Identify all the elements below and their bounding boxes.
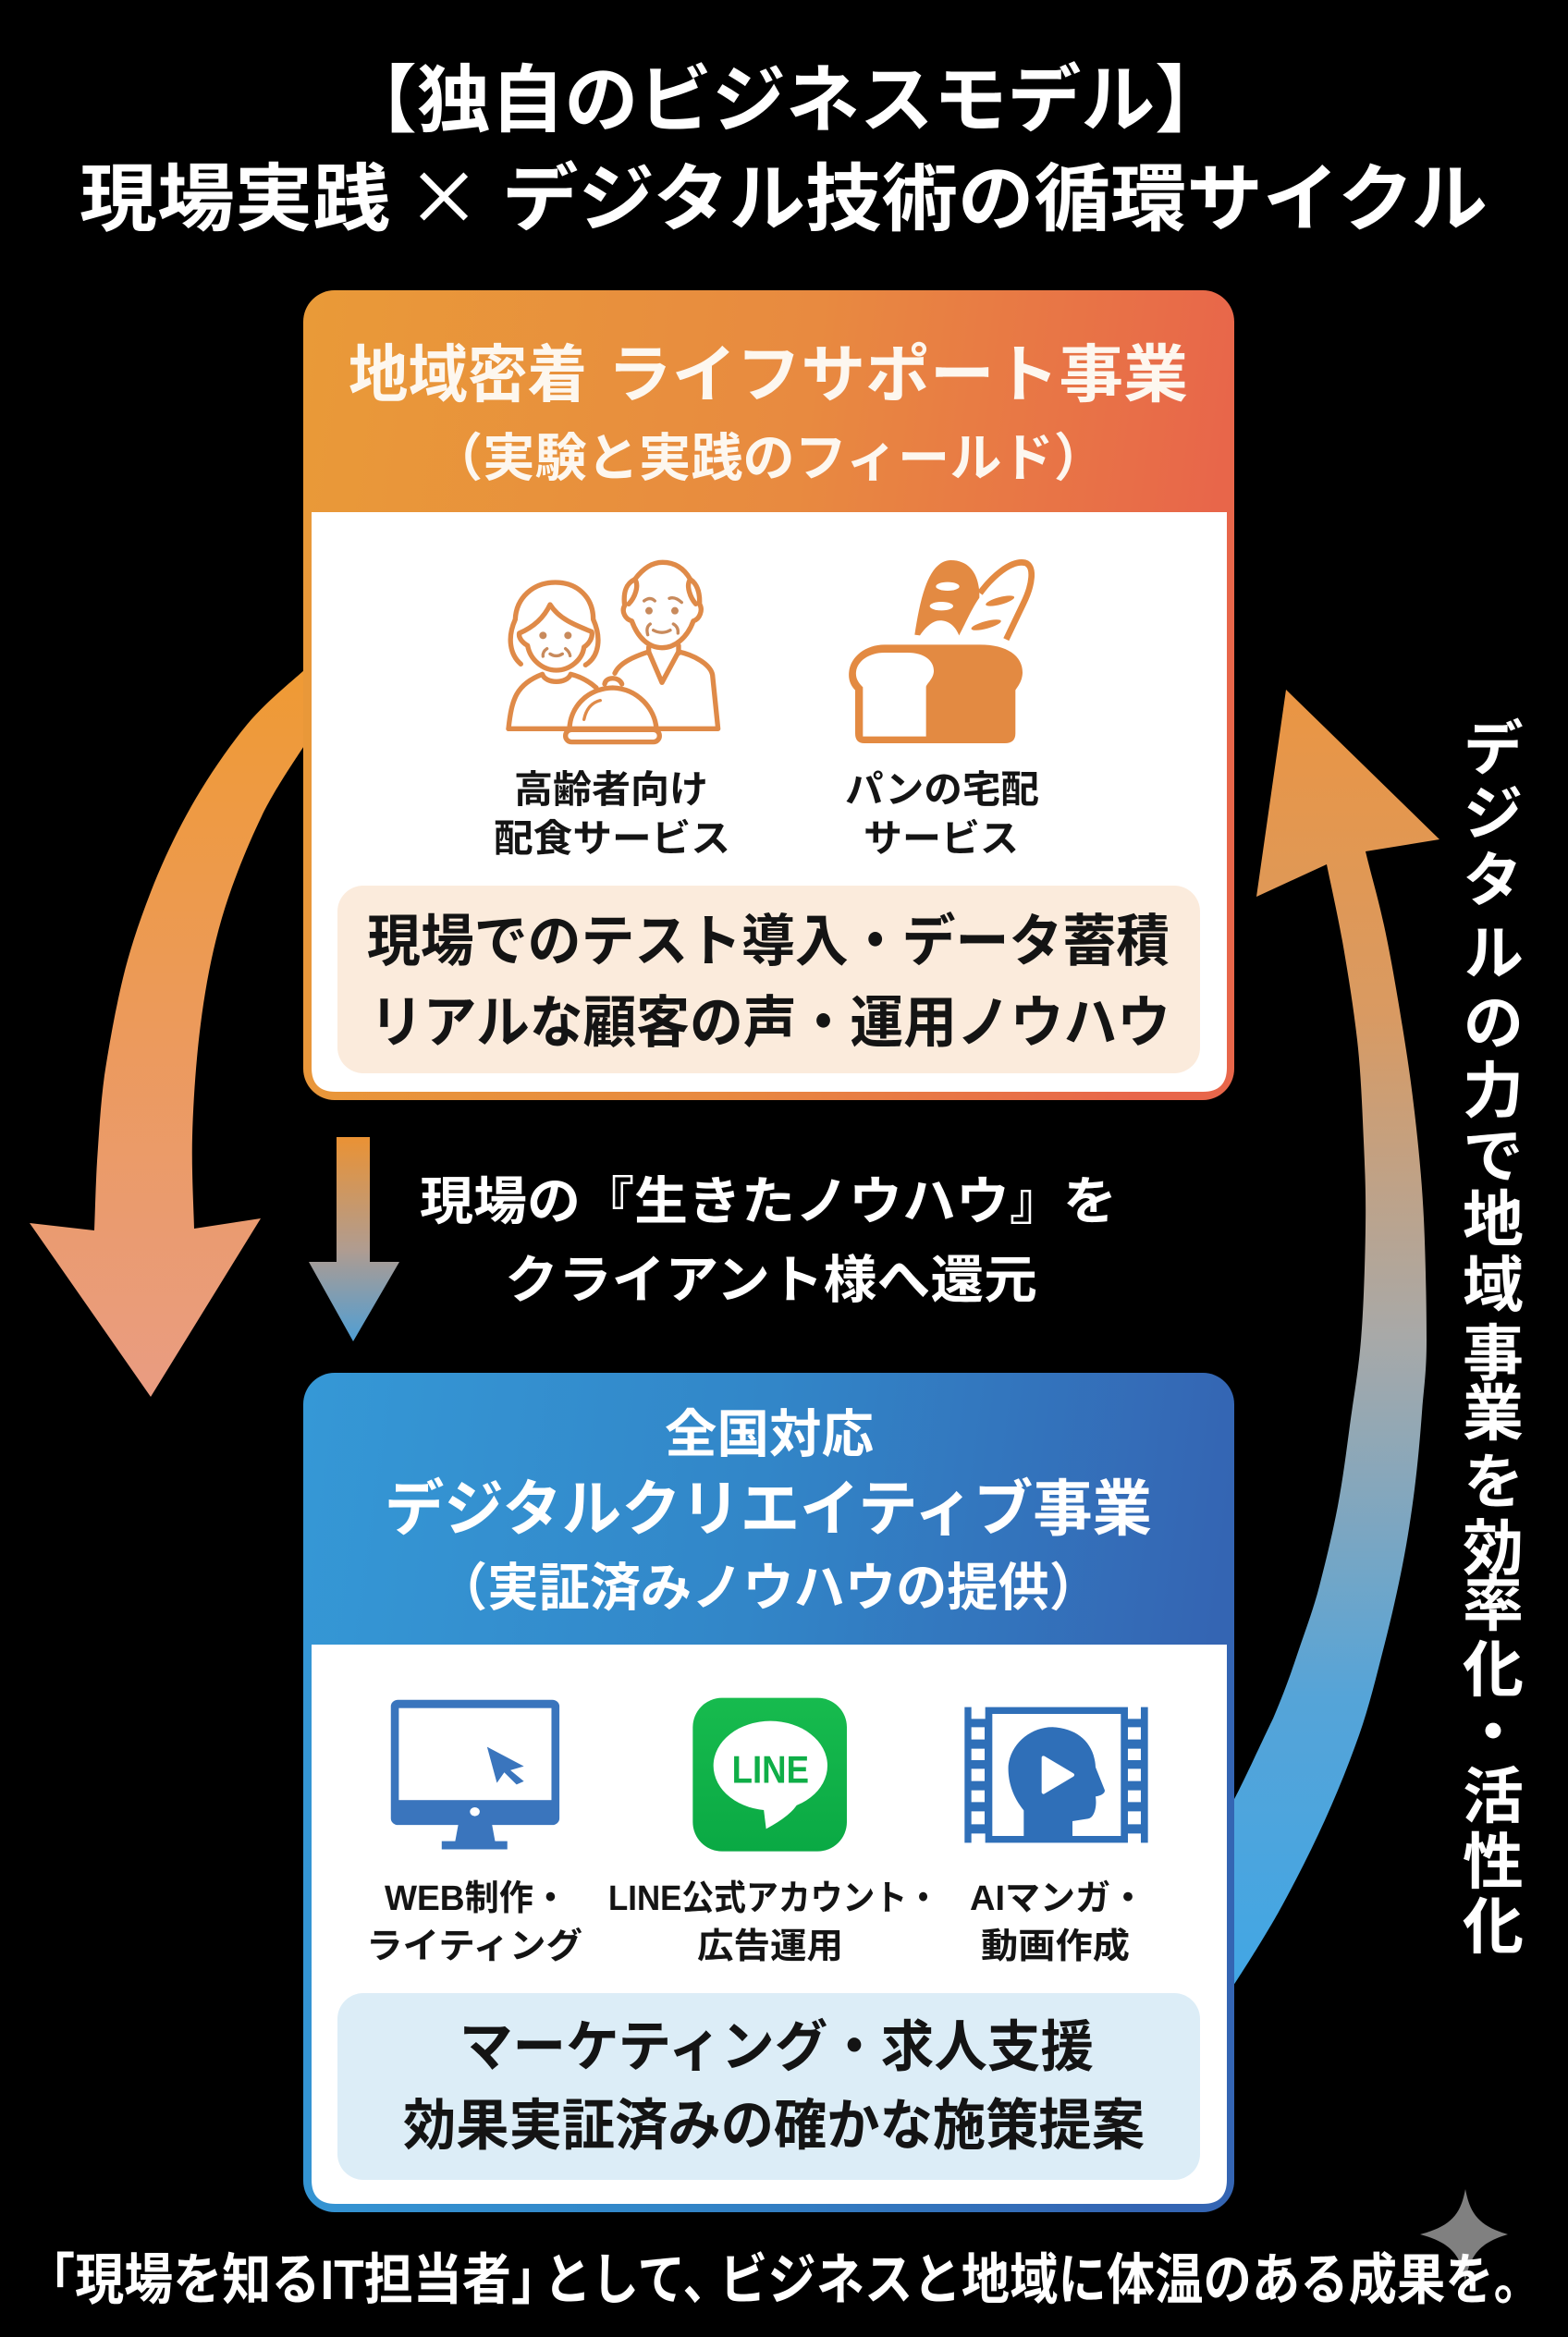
- panel heading: デジタルクリエイティブ事業: [385, 1474, 1152, 1543]
- callout: field data: [337, 886, 1200, 1073]
- icon: bread and baguettes: [849, 560, 1032, 743]
- panel heading: （実証済みノウハウの提供）: [436, 1559, 1100, 1617]
- panel frame with orange header: [303, 290, 1234, 1100]
- callout: field data: リアルな顧客の声・運用ノウハウ: [370, 991, 1170, 1054]
- label: meal delivery: 高齢者向け: [514, 768, 708, 811]
- label: bread delivery: サービス: [864, 817, 1019, 860]
- label: meal delivery: 配食サービス: [494, 817, 730, 860]
- icon: LINE logo: LINE: [732, 1748, 809, 1791]
- icon: sparkle: [1420, 2189, 1508, 2282]
- arrow: digital creative to life support (right curved): [1233, 690, 1439, 1986]
- text: vertical slogan: デジタルの力で地域事業を効率化・活性化: [1454, 716, 1524, 1955]
- title: 【独自のビジネスモデル】: [343, 59, 1229, 141]
- panel heading: [349, 340, 1188, 487]
- text: closing message: [26, 2249, 1542, 2311]
- panel: life support business: [303, 290, 1234, 1100]
- title: [80, 59, 1488, 247]
- icon: elderly couple with meal cloche: [508, 562, 718, 742]
- panel heading: 全国対応: [665, 1405, 874, 1463]
- arrow: life support to digital creative (left curved): [30, 669, 305, 1397]
- panel heading: ライフサポート事業: [607, 340, 1188, 410]
- icon: LINE logo: [692, 1698, 847, 1852]
- callout: marketing support: マーケティング・求人支援: [459, 2016, 1094, 2078]
- icon: monitor with cursor: [391, 1700, 559, 1850]
- label: web production: [366, 1879, 582, 1966]
- panel heading: 地域密着: [349, 340, 587, 410]
- panel: digital creative business: [303, 1373, 1234, 2212]
- panel frame with blue header: [303, 1373, 1234, 2212]
- label: LINE official account: 広告運用: [697, 1927, 843, 1966]
- text: feedback of know-how: クライアント様へ還元: [505, 1251, 1037, 1309]
- callout: marketing support: [337, 1993, 1200, 2180]
- text: closing message: 「現場を知るIT担当者」: [26, 2249, 560, 2311]
- title: デジタル技術の循環サイクル: [502, 158, 1488, 240]
- text: closing message: として、: [544, 2249, 730, 2311]
- callout: marketing support: 効果実証済みの確かな施策提案: [403, 2095, 1145, 2157]
- label: LINE official account: LINE公式アカウント・: [608, 1879, 939, 1918]
- label: AI manga video: 動画作成: [981, 1927, 1130, 1966]
- title: 現場実践: [80, 158, 390, 240]
- panel white body: [312, 1645, 1227, 2204]
- arrow: small centre down arrow: [309, 1137, 399, 1341]
- title: ×: [407, 140, 481, 247]
- label: web production: ライティング: [366, 1927, 582, 1966]
- label: LINE official account: [608, 1879, 939, 1966]
- label: AI manga video: AIマンガ・: [970, 1879, 1145, 1918]
- label: bread delivery: [845, 768, 1039, 860]
- text: feedback of know-how: [420, 1172, 1117, 1309]
- panel heading: （実験と実践のフィールド）: [431, 429, 1106, 487]
- text: feedback of know-how: 現場の『生きたノウハウ』を: [420, 1172, 1117, 1230]
- callout: field data: 現場でのテスト導入・データ蓄積: [367, 910, 1170, 973]
- label: bread delivery: パンの宅配: [845, 768, 1039, 811]
- label: meal delivery: [494, 768, 730, 860]
- label: AI manga video: [970, 1879, 1145, 1966]
- icon: film strip with head and play button: [964, 1707, 1148, 1842]
- panel heading: [385, 1405, 1152, 1617]
- label: web production: WEB制作・: [385, 1879, 568, 1918]
- panel white body: [312, 512, 1227, 1092]
